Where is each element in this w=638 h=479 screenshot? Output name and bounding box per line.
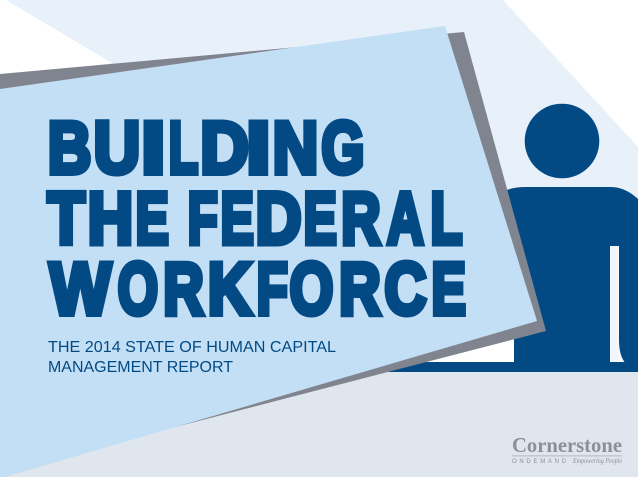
- icon: person at desk: [380, 104, 638, 372]
- arm gap: [610, 246, 624, 362]
- title line 2: E: [136, 178, 169, 260]
- logo tagline: Empowering People: [572, 457, 622, 465]
- title line 1: I: [141, 107, 165, 189]
- title line 1: U: [94, 107, 140, 189]
- title line 2: H: [88, 178, 133, 260]
- title: [48, 107, 466, 330]
- title line 3: F: [257, 248, 288, 330]
- subtitle line 1: THE 2014 STATE OF HUMAN CAPITAL: [48, 339, 336, 356]
- desk: [380, 362, 638, 372]
- title line 2: D: [256, 178, 301, 260]
- title line 3: O: [118, 248, 158, 330]
- background: pale blue angled panel: [0, 0, 638, 380]
- background: bottom band: [0, 372, 638, 477]
- subtitle line 2: MANAGEMENT REPORT: [48, 359, 233, 376]
- title line 3: R: [163, 248, 204, 330]
- title line 3: R: [339, 248, 381, 330]
- person head: [525, 104, 599, 178]
- title line 3: E: [432, 248, 466, 330]
- subtitle: [48, 339, 336, 376]
- grey shadow panel: [0, 32, 546, 431]
- logo: Cornerstone OnDemand: [512, 433, 622, 465]
- title line 2: F: [188, 178, 218, 260]
- title line 1: I: [246, 107, 270, 189]
- title line 3: K: [208, 248, 252, 330]
- title line 2: L: [430, 178, 462, 260]
- logo wordmark: Cornerstone: [512, 433, 622, 457]
- title line 1: L: [169, 107, 198, 189]
- blue title panel: [0, 26, 537, 477]
- title line 2: T: [48, 178, 85, 260]
- title line 2: E: [221, 178, 254, 260]
- title line 2: R: [341, 178, 381, 260]
- title line 2: E: [304, 178, 337, 260]
- logo ondemand: ONDEMAND: [512, 459, 567, 465]
- title line 3: O: [290, 248, 333, 330]
- desk opening: [420, 320, 514, 362]
- title line 1: N: [273, 107, 318, 189]
- title line 1: B: [48, 107, 91, 189]
- person body: [490, 187, 638, 372]
- title line 3: C: [384, 248, 426, 330]
- title line 1: G: [322, 107, 364, 189]
- title line 1: D: [200, 107, 249, 189]
- title line 2: A: [387, 178, 424, 260]
- title line 3: W: [50, 248, 112, 330]
- logo rule: [512, 454, 622, 457]
